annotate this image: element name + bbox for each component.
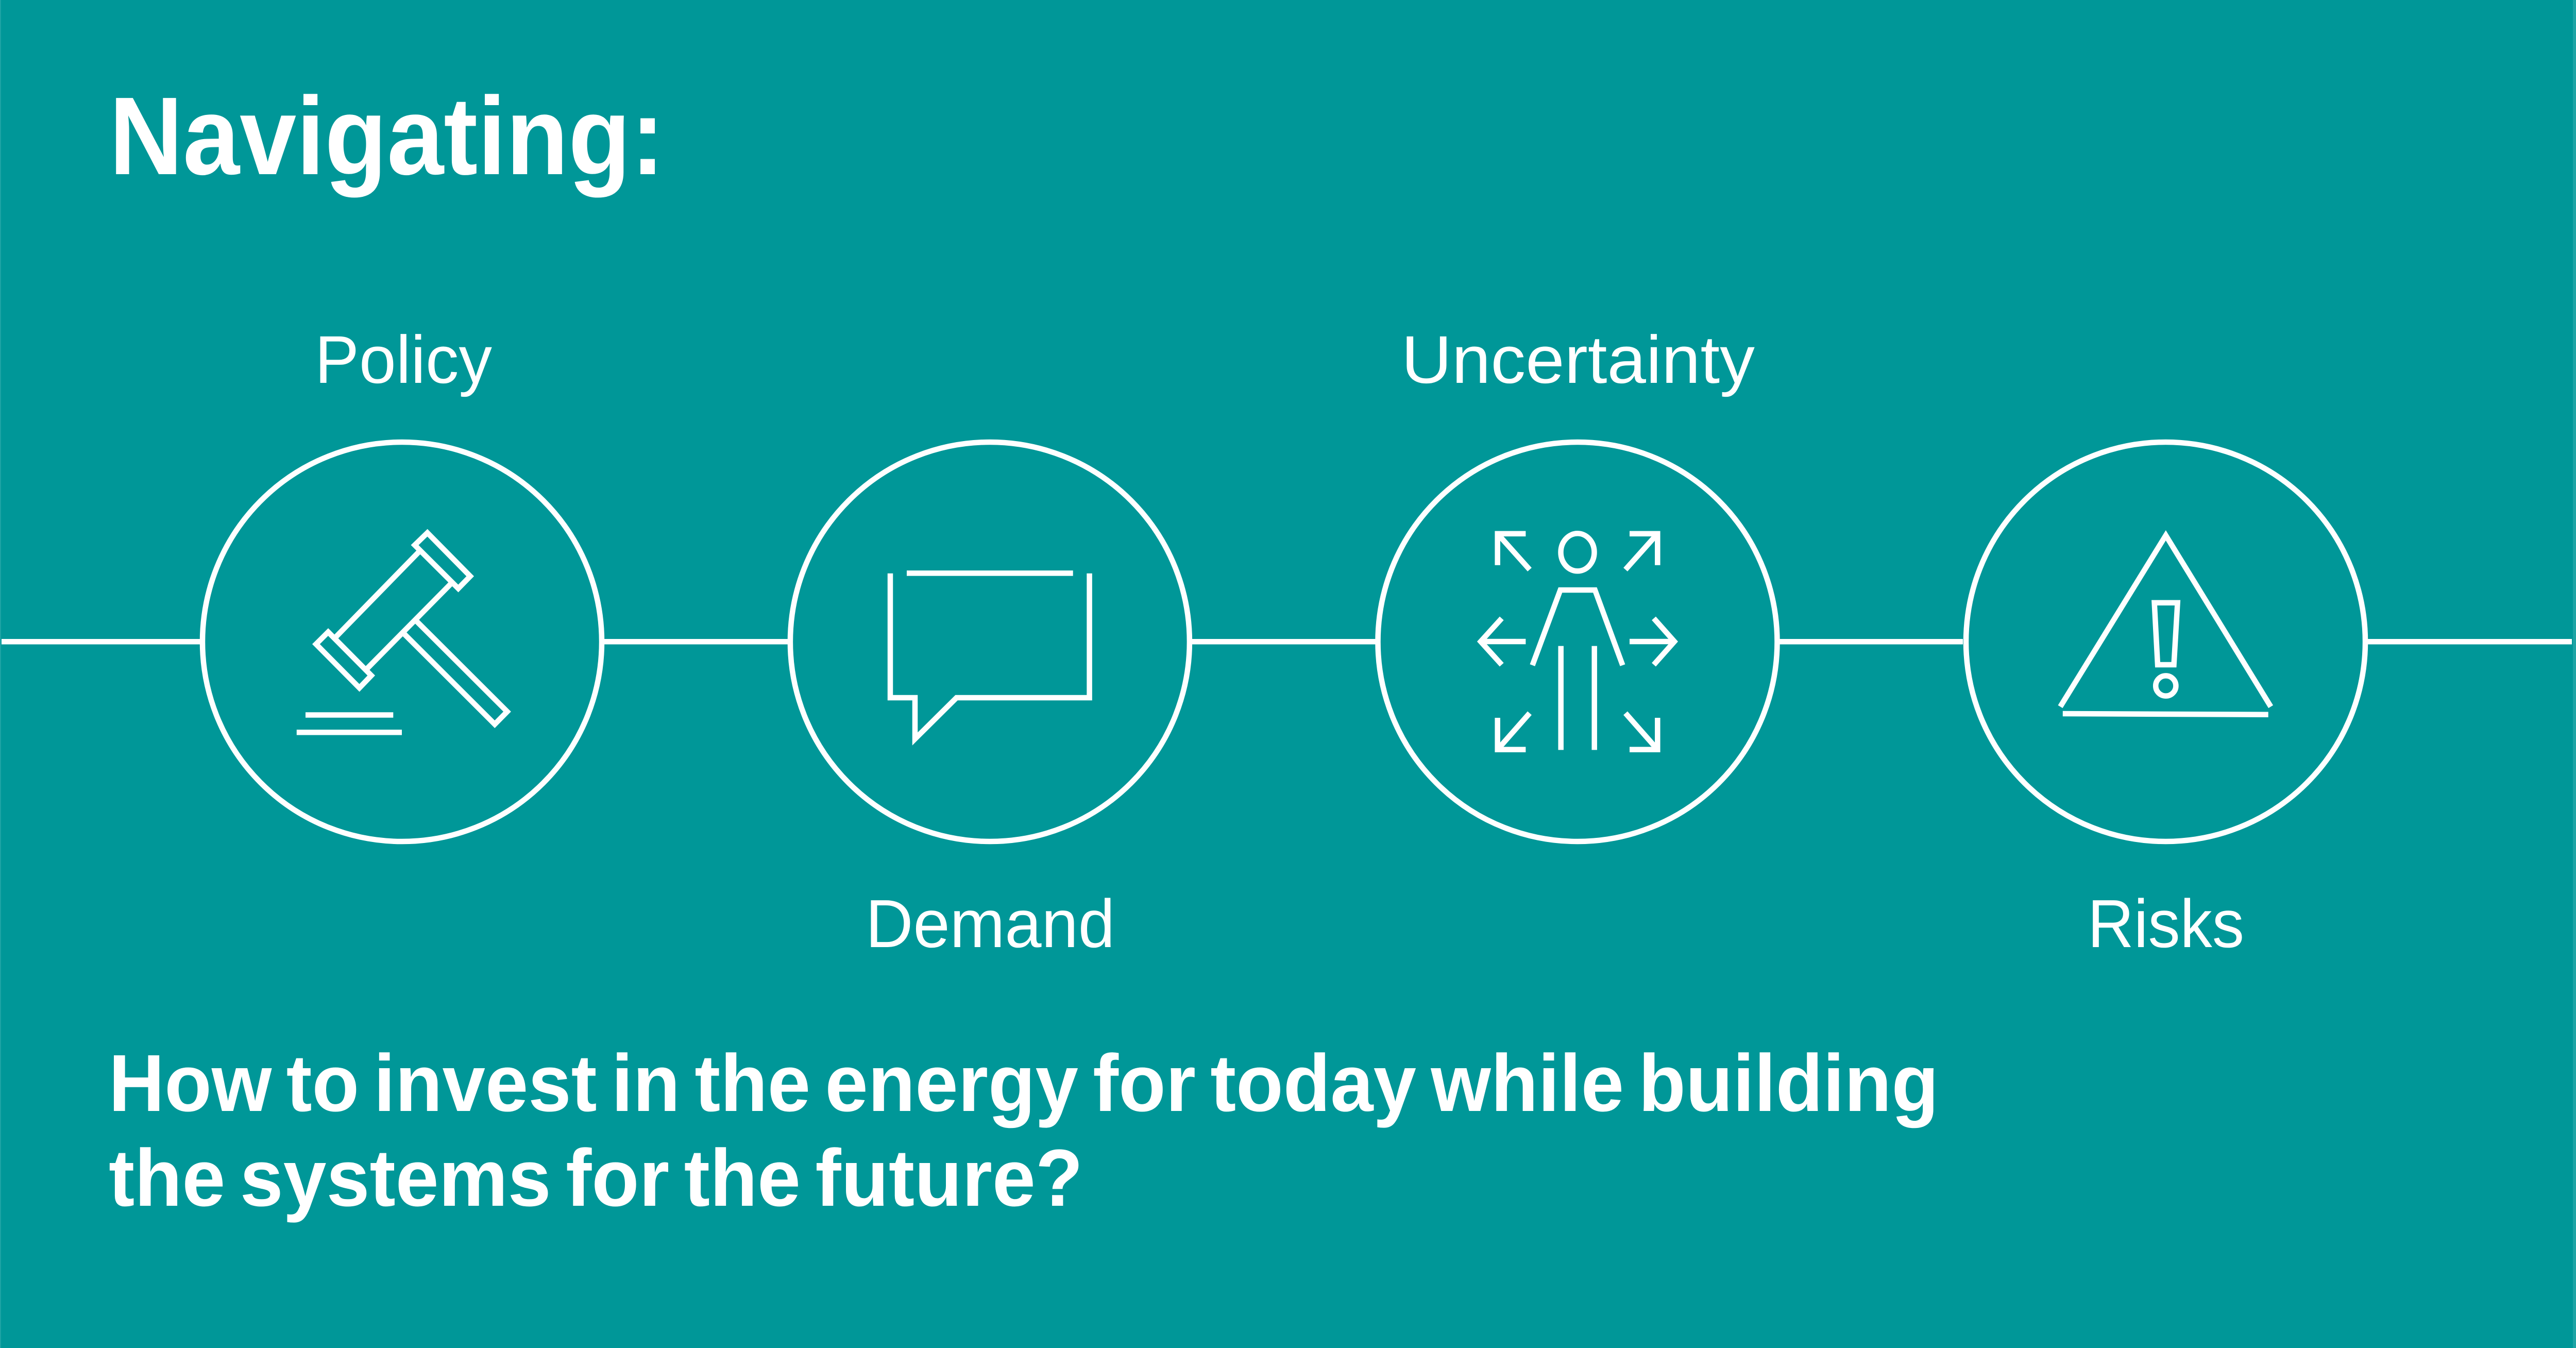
node: Risks warning triangle (1966, 442, 2365, 841)
node: Uncertainty person (1378, 442, 1777, 841)
timeline line (2, 639, 2572, 644)
question text: How to invest in the energy for today while building (109, 1038, 1939, 1128)
title: Navigating: (109, 74, 665, 198)
icon: person with arrows (1481, 533, 1674, 750)
label: Demand: Demand (866, 886, 1115, 962)
icon: gavel (297, 533, 507, 732)
label: Policy: Policy (315, 322, 492, 397)
node: Policy gavel (202, 442, 602, 841)
question text (109, 1038, 1939, 1223)
node: Demand speech bubble (790, 442, 1190, 841)
label: Uncertainty: Uncertainty (1401, 322, 1755, 397)
icon: warning triangle (2060, 535, 2271, 715)
label: Risks: Risks (2088, 886, 2244, 962)
question text: the systems for the future? (109, 1133, 1083, 1223)
icon: speech bubble (890, 573, 1090, 739)
